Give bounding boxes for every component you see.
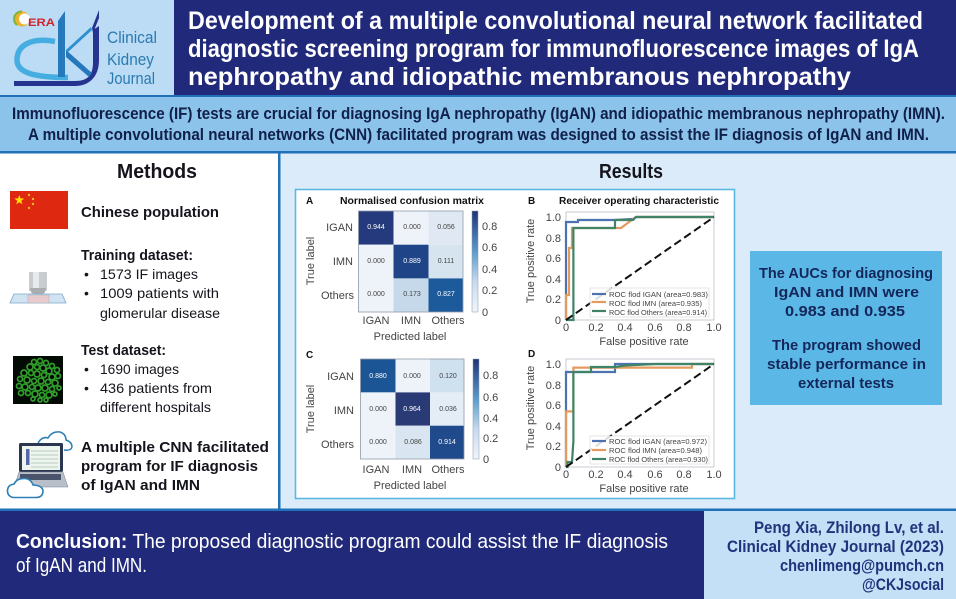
chart C: confusion matrix external test: IMN (402, 464, 422, 476)
chart A: normalised confusion matrix: A (306, 196, 313, 207)
text: training dataset: glomerular disease (100, 305, 220, 321)
chart C: confusion matrix external test: IGAN (327, 371, 354, 383)
chart B: ROC curves: 1.0 (706, 322, 722, 334)
chart C: confusion matrix external test: 0.000 (403, 373, 421, 380)
chart D: ROC curves external test: 0 (563, 469, 569, 481)
chart A: normalised confusion matrix: 0.827 (437, 291, 455, 298)
chart C: confusion matrix external test: True label (305, 385, 317, 433)
text: CNN program: program for IF diagnosis (81, 458, 258, 475)
chart B: ROC curves: ROC flod IMN (area=0.935) (609, 299, 702, 308)
chart D: ROC curves external test: 0.6 (647, 469, 663, 481)
chart B: ROC curves: 0.2 (546, 294, 561, 306)
chart C: confusion matrix external test: 0.120 (439, 373, 457, 380)
chart C: confusion matrix external test: 0.000 (369, 439, 387, 446)
chart A: normalised confusion matrix: IMN (333, 256, 353, 268)
chart C: confusion matrix external test: 0 (483, 454, 489, 466)
citation and contact: Clinical Kidney Journal (2023) (727, 538, 944, 556)
text: training dataset: 1573 IF images (100, 266, 198, 282)
chart D: ROC curves external test: 0 (555, 462, 561, 474)
heading: results: Results (599, 161, 663, 183)
journal logo: ERA (28, 17, 55, 29)
text: CNN program: A multiple CNN facilitated (81, 439, 269, 456)
chart B: ROC curves: 0.6 (546, 253, 561, 265)
chart B: ROC curves: 0.4 (617, 322, 633, 334)
chart D: ROC curves external test: True positive rate (525, 366, 537, 450)
citation and contact: Peng Xia, Zhilong Lv, et al. (754, 519, 944, 537)
chart A: normalised confusion matrix (305, 196, 497, 343)
chart A: normalised confusion matrix: 0.000 (367, 291, 385, 298)
journal logo: Journal (107, 70, 155, 88)
text: CNN program (81, 439, 269, 494)
chart D: ROC curves external test: 0.2 (546, 441, 561, 453)
conclusion: Conclusion: The proposed diagnostic program could assist the IF diagnosis (16, 531, 668, 553)
text: test dataset: 1690 images (100, 361, 179, 377)
chart B: ROC curves: 0.6 (647, 322, 663, 334)
chart A: normalised confusion matrix: IGAN (363, 315, 389, 327)
title: nephropathy and idiopathic membranous nephropathy (188, 63, 851, 91)
callout: AUC findings (750, 251, 942, 405)
chart C: confusion matrix external test: 0.4 (483, 413, 498, 425)
text: Chinese population: Chinese population (81, 204, 219, 221)
text: training dataset: 1009 patients with (100, 285, 219, 301)
citation and contact: @CKJsocial (862, 576, 944, 594)
callout: AUC findings: stable performance in (767, 356, 926, 373)
panel: results figure (296, 190, 734, 498)
text: training dataset: • (84, 266, 89, 282)
chart D: ROC curves external test: 0.4 (617, 469, 633, 481)
chart A: normalised confusion matrix: 0.000 (367, 258, 385, 265)
chart A: normalised confusion matrix: Others (321, 290, 354, 302)
chart D: ROC curves external test: D (528, 349, 535, 360)
chart A: normalised confusion matrix: 0.173 (403, 291, 421, 298)
text: test dataset (81, 342, 212, 415)
chart B: ROC curves: Receiver operating characteristic (559, 196, 719, 207)
chart C: confusion matrix external test: 0.036 (439, 406, 457, 413)
chart C: confusion matrix external test: 0.964 (403, 406, 421, 413)
journal logo: Clinical (107, 29, 157, 47)
chart C: confusion matrix external test: IGAN (363, 464, 389, 476)
chart D: ROC curves external test: 0.8 (546, 380, 561, 392)
text: test dataset: • (84, 380, 89, 396)
journal logo: Kidney (107, 51, 155, 69)
text: training dataset: • (84, 285, 89, 301)
text: training dataset: Training dataset: (81, 247, 193, 264)
chart D: ROC curves external test (525, 349, 722, 495)
chart C: confusion matrix external test: 0.880 (369, 373, 387, 380)
chart A: normalised confusion matrix: IGAN (326, 222, 353, 234)
chart C: confusion matrix external test: 0.2 (483, 433, 498, 445)
chart A: normalised confusion matrix: 0.944 (367, 224, 385, 231)
conclusion: of IgAN and IMN. (16, 555, 147, 577)
chart A: normalised confusion matrix: 0 (482, 307, 488, 319)
chart D: ROC curves external test: ROC flod IGAN (area=0.972) (609, 437, 707, 446)
chart B: ROC curves: B (528, 196, 535, 207)
chart B: ROC curves: 0.4 (546, 274, 561, 286)
chart A: normalised confusion matrix: 0.000 (403, 224, 421, 231)
chart D: ROC curves external test: 0.6 (546, 400, 561, 412)
chart C: confusion matrix external test: C (306, 350, 313, 361)
chart C: confusion matrix external test: 0.914 (438, 439, 456, 446)
chart B: ROC curves: 0.8 (676, 322, 692, 334)
chart B: ROC curves: 1.0 (546, 212, 561, 224)
chart C: confusion matrix external test (305, 350, 498, 492)
text: test dataset: different hospitals (100, 399, 211, 415)
chart D: ROC curves external test: 1.0 (706, 469, 722, 481)
chart A: normalised confusion matrix: 0.4 (482, 264, 497, 276)
chart C: confusion matrix external test: 0.6 (483, 392, 498, 404)
chart A: normalised confusion matrix: 0.889 (403, 258, 421, 265)
callout: AUC findings: IgAN and IMN were (774, 284, 919, 301)
text: training dataset (81, 247, 220, 321)
callout: AUC findings: external tests (798, 375, 894, 392)
chart D: ROC curves external test: 0.8 (676, 469, 692, 481)
chart A: normalised confusion matrix: Normalised confusion matrix (340, 196, 484, 207)
panel: methods (0, 154, 278, 508)
summary text (0, 97, 956, 151)
chart D: ROC curves external test: 0.4 (546, 421, 561, 433)
chart A: normalised confusion matrix: 0.6 (482, 242, 497, 254)
title (174, 0, 956, 95)
chart B: ROC curves: False positive rate (599, 336, 689, 348)
chart B: ROC curves: 0 (563, 322, 569, 334)
chart C: confusion matrix external test: Predicted label (374, 480, 446, 492)
chart C: confusion matrix external test: 0.8 (483, 370, 498, 382)
chart A: normalised confusion matrix: Others (431, 315, 465, 327)
chart A: normalised confusion matrix: 0.111 (438, 258, 454, 265)
chart C: confusion matrix external test: Others (431, 464, 465, 476)
chart D: ROC curves external test: ROC flod IMN (area=0.948) (609, 446, 702, 455)
text: CNN program: of IgAN and IMN (81, 477, 200, 494)
text: test dataset: 436 patients from (100, 380, 212, 396)
chart A: normalised confusion matrix: IMN (401, 315, 421, 327)
chart B: ROC curves: ROC flod IGAN (area=0.983) (609, 290, 708, 299)
chart B: ROC curves: 0 (555, 315, 561, 327)
chart B: ROC curves: 0.8 (546, 233, 561, 245)
chart A: normalised confusion matrix: 0.8 (482, 221, 497, 233)
callout: AUC findings: 0.983 and 0.935 (785, 303, 905, 320)
chart D: ROC curves external test: ROC flod Others (area=0.930) (609, 455, 708, 464)
callout: AUC findings: The AUCs for diagnosing (759, 265, 933, 282)
citation and contact (704, 511, 956, 599)
chart B: ROC curves: 0.2 (588, 322, 604, 334)
title: Development of a multiple convolutional neural network facilitated (188, 7, 923, 35)
chart C: confusion matrix external test: Others (321, 439, 354, 451)
chart A: normalised confusion matrix: 0.056 (437, 224, 455, 231)
chart C: confusion matrix external test: 0.086 (404, 439, 422, 446)
chart D: ROC curves external test: 1.0 (546, 359, 561, 371)
chart B: ROC curves: ROC flod Others (area=0.914) (609, 308, 707, 317)
chart A: normalised confusion matrix: True label (305, 237, 317, 285)
chart B: ROC curves: True positive rate (525, 219, 537, 303)
heading: methods: Methods (117, 161, 197, 183)
chart A: normalised confusion matrix: Predicted label (374, 331, 446, 343)
callout: AUC findings: The program showed (772, 337, 921, 354)
chart C: confusion matrix external test: 0.000 (369, 406, 387, 413)
chart D: ROC curves external test: 0.2 (588, 469, 604, 481)
text: test dataset: Test dataset: (81, 342, 166, 359)
icon: microscope slide (10, 272, 66, 303)
chart C: confusion matrix external test: IMN (334, 405, 354, 417)
chart A: normalised confusion matrix: 0.2 (482, 285, 497, 297)
journal logo (0, 0, 174, 95)
chart D: ROC curves external test: False positive rate (599, 483, 689, 495)
icon: China flag (10, 191, 68, 229)
icon: laptop with clouds (7, 432, 72, 498)
text: test dataset: • (84, 361, 89, 377)
chart B: ROC curves (525, 196, 722, 348)
icon: immunofluorescence image (13, 356, 63, 404)
conclusion (0, 511, 704, 599)
